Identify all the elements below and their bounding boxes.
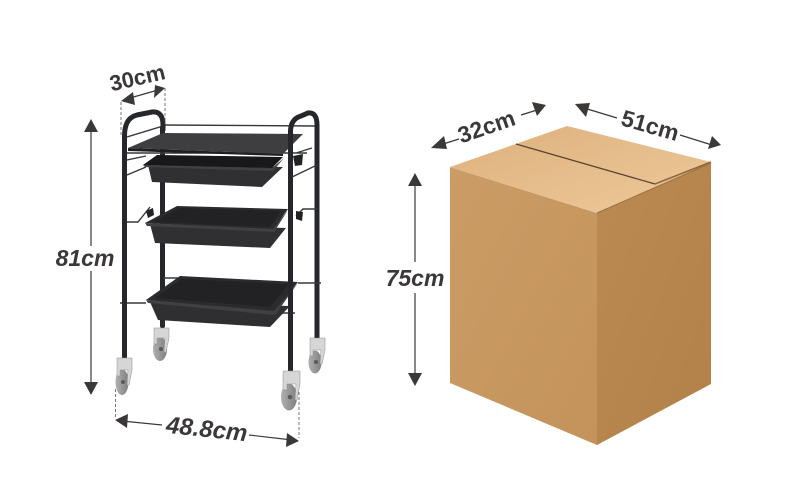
tray: bottom [146, 276, 298, 327]
side rails [120, 125, 321, 313]
dimension: trolley depth 30cm: 30cm [107, 59, 168, 96]
dimension: box depth 32cm [431, 102, 546, 149]
tray: middle [145, 206, 303, 248]
front posts [124, 112, 317, 370]
dimension: box height 75cm [386, 173, 444, 386]
dimension: trolley width 48.8cm: 48.8cm [164, 412, 249, 447]
dimension: trolley height 81cm [56, 119, 114, 395]
dimension: box width 51cm: 51cm [618, 105, 682, 146]
box top face [450, 126, 711, 213]
box flap seam [516, 144, 711, 213]
caster: front left [116, 358, 132, 395]
caster: front right [281, 371, 300, 410]
product: storage trolley [116, 112, 325, 410]
back posts [162, 126, 317, 339]
caster: back left [153, 328, 169, 361]
dimension: box width 51cm [575, 103, 721, 149]
dimension: trolley width 48.8cm [115, 389, 299, 447]
dimension: trolley depth 30cm [107, 59, 168, 135]
dimension: box depth 32cm: 32cm [454, 105, 518, 148]
cardboard box [450, 126, 711, 445]
dimension: trolley height 81cm: 81cm [56, 245, 114, 271]
caster: back right [308, 338, 325, 374]
dimension: box height 75cm: 75cm [386, 265, 444, 291]
box left face [450, 167, 597, 445]
box right face [597, 162, 711, 445]
tray: top [143, 154, 303, 187]
tabletop [128, 133, 303, 156]
